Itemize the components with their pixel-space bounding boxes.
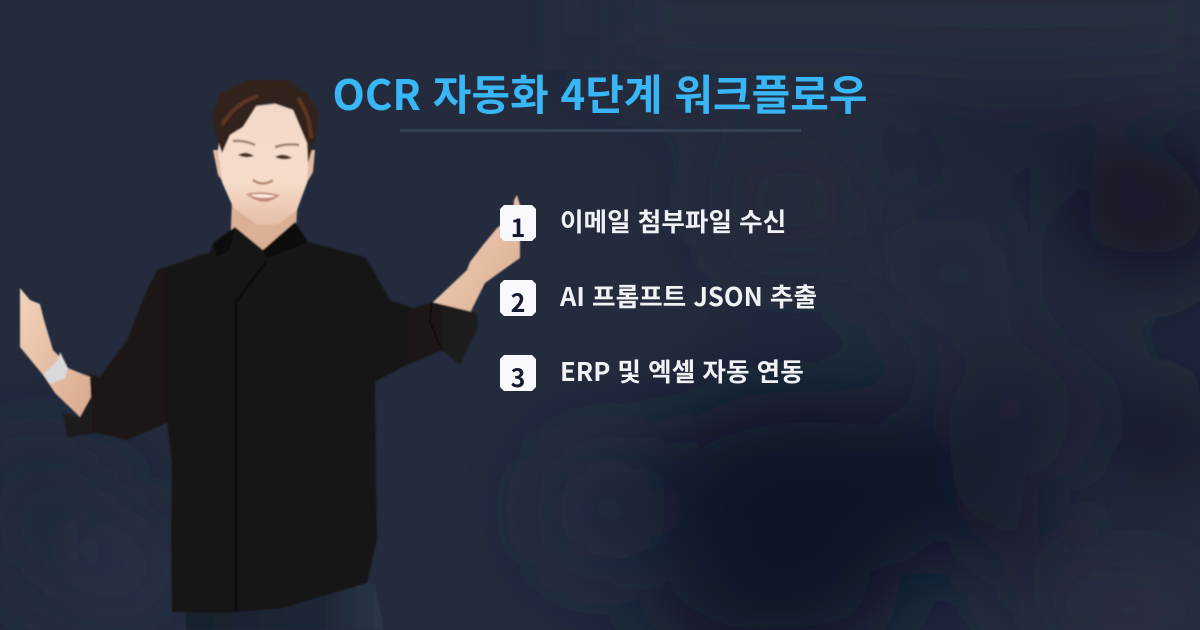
left arm and hand bbox=[20, 288, 91, 417]
wristband bbox=[43, 352, 68, 384]
step 2 number badge bbox=[500, 280, 536, 316]
face bbox=[218, 100, 309, 225]
neck bbox=[230, 200, 298, 302]
step 3 number badge: 3 bbox=[511, 359, 525, 395]
step 2 label: AI 프롬프트 JSON 추출 bbox=[560, 277, 817, 314]
step 1 label: 이메일 첨부파일 수신 bbox=[560, 202, 786, 239]
right arm and hand bbox=[430, 195, 520, 347]
hair highlights bbox=[222, 96, 311, 138]
step 1 number badge bbox=[500, 205, 536, 241]
step 3 label: ERP 및 엑셀 자동 연동 bbox=[560, 352, 804, 389]
mouth bbox=[246, 192, 280, 202]
shirt collar and placket bbox=[213, 222, 442, 612]
step 3 number badge bbox=[500, 355, 536, 391]
eyebrows bbox=[233, 141, 299, 147]
nose shadow bbox=[253, 180, 273, 184]
shirt bbox=[63, 222, 478, 613]
title underline bbox=[400, 129, 801, 132]
hair bbox=[212, 80, 319, 163]
jeans bbox=[185, 580, 384, 630]
title: OCR 자동화 4단계 워크플로우 bbox=[332, 62, 868, 123]
step 1 number badge: 1 bbox=[511, 209, 525, 245]
eyes bbox=[238, 153, 292, 159]
ears bbox=[213, 150, 315, 186]
step 2 number badge: 2 bbox=[511, 284, 525, 320]
